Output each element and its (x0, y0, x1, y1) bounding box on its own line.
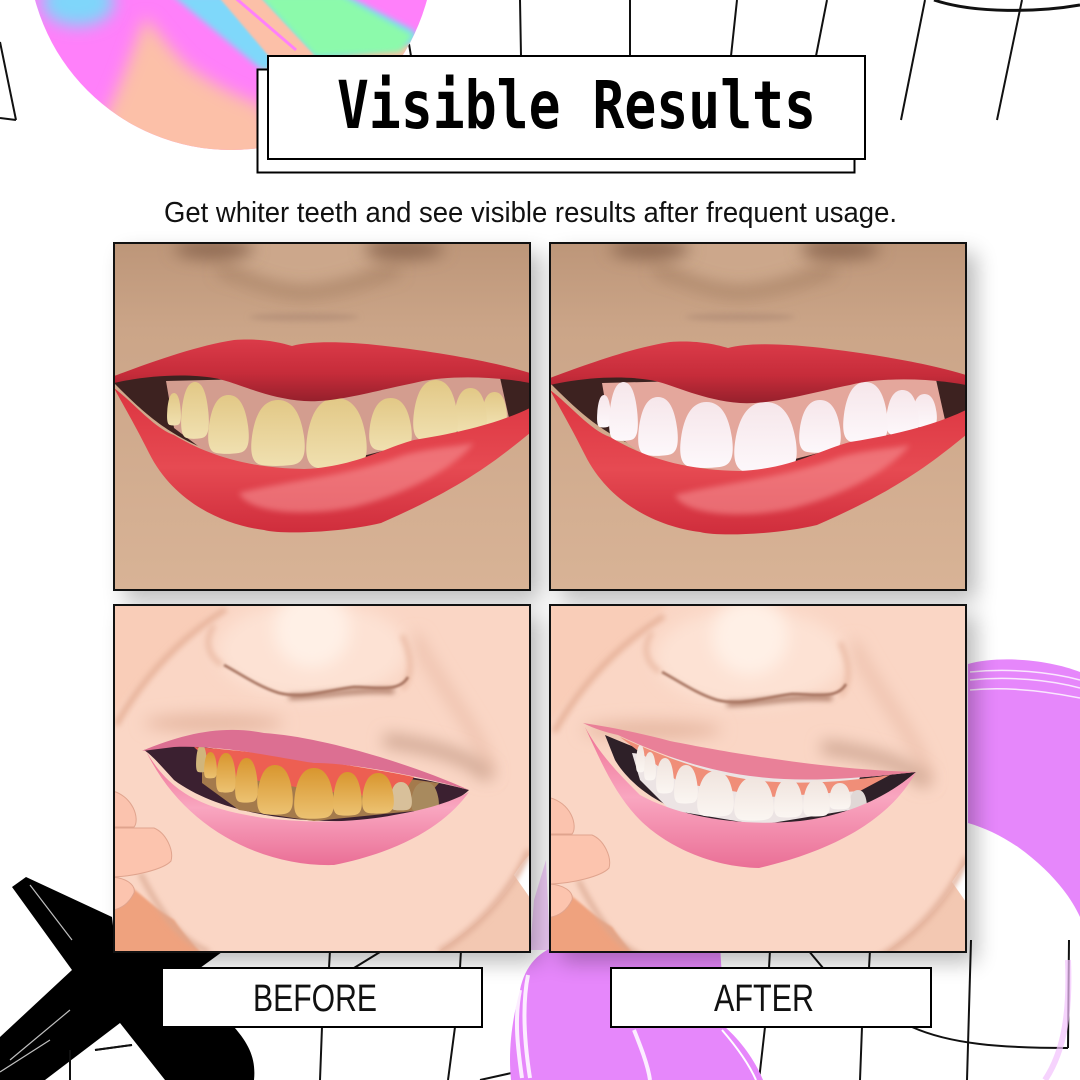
mouth interior (144, 746, 469, 821)
after label: AFTER (714, 978, 814, 1020)
iridescent circle (35, 0, 427, 150)
photo panel: before, pink lips (109, 592, 535, 957)
photo panel: before, red lips (114, 210, 530, 590)
pink lips (146, 751, 469, 865)
gums (602, 375, 945, 473)
panel drop shadows (124, 253, 976, 962)
after label (611, 968, 931, 1027)
title: Visible Results (337, 69, 816, 145)
black brush stroke X (0, 875, 254, 1080)
before label: BEFORE (253, 978, 377, 1020)
gums (166, 373, 509, 471)
mouth interior (605, 735, 916, 823)
stained teeth (196, 745, 439, 819)
photo panel: after, red lips (550, 210, 966, 590)
purple brush stroke: bottom (510, 860, 763, 1080)
title plate (258, 56, 865, 172)
whitened teeth (636, 745, 867, 821)
whitened teeth (597, 382, 937, 473)
before label (162, 968, 482, 1027)
stained teeth (167, 380, 507, 469)
photo panel: after, pink lips (547, 599, 973, 964)
subtitle: Get whiter teeth and see visible results after frequent usage. (164, 197, 897, 229)
pink lips (585, 727, 916, 868)
purple brush stroke: right (968, 659, 1080, 1080)
